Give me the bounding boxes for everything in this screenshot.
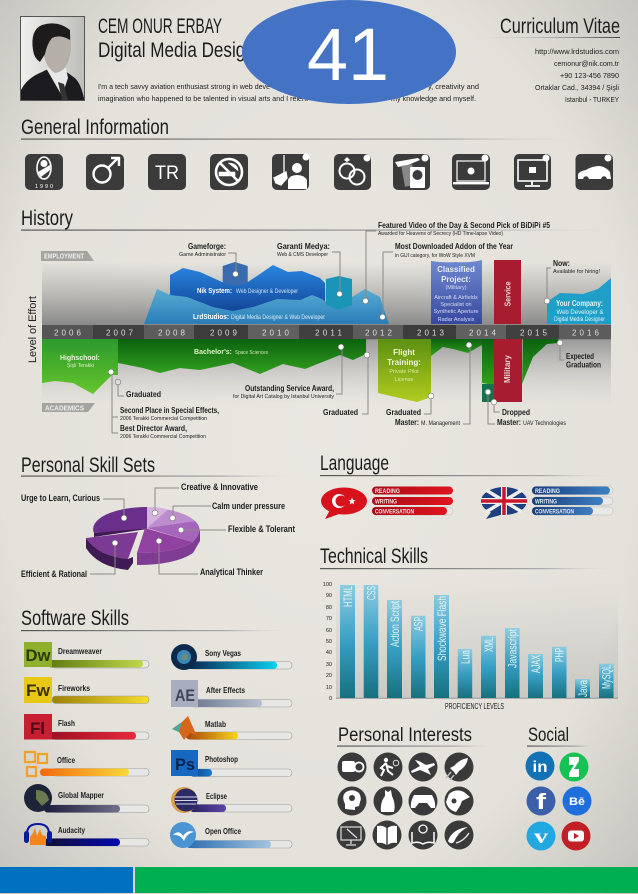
- leader lines and labels: employment: Garanti Medya:: [277, 241, 330, 251]
- area: bachelor's: Space Sciences: [235, 350, 268, 356]
- number badge: [242, 0, 456, 104]
- icon: photography: [338, 752, 366, 782]
- heading: Software Skills: Software Skills: [21, 607, 129, 630]
- leader lines and labels: employment: Game Administrator: [179, 252, 226, 258]
- area: Nik System employment: Web Designer & Developer: [236, 289, 298, 295]
- skill: Fireworks: [24, 677, 149, 704]
- area: expected graduation: [522, 339, 558, 384]
- icon: no smoking: [210, 154, 248, 190]
- chart: personal skills pie: Analytical Thinker: [200, 567, 263, 577]
- area: highschool: [42, 339, 118, 394]
- skill: Office: Office: [57, 755, 75, 765]
- area: bachelor's: Bachelor's:: [194, 347, 232, 356]
- leader lines and labels: academics: 2006 Terakki Commercial Competition: [120, 416, 207, 422]
- panel: language English: READING: [535, 489, 560, 495]
- skill: Photoshop: Ps: [175, 755, 195, 774]
- chart: technical skills bars: [323, 582, 618, 711]
- skill: Photoshop: Photoshop: [205, 754, 238, 764]
- skill: Audacity: [24, 824, 149, 846]
- header: intro text: y, creativity and: [428, 82, 479, 91]
- panel: language Turkish: [321, 486, 453, 519]
- skill: Global Mapper: Global Mapper: [58, 790, 105, 800]
- area: LrdStudios employment: LrdStudios:: [193, 312, 229, 321]
- area: classified project: Synthetic Aperture: [434, 309, 478, 315]
- chart: personal skills pie: Flexible & Tolerant: [228, 524, 295, 534]
- header: intro text: [98, 82, 479, 103]
- area: flight training: Flight: [393, 348, 415, 357]
- axis ticks: 90: [326, 593, 332, 599]
- chart: personal skills pie: Urge to Learn, Curious: [21, 493, 100, 503]
- panel: language English: WRITING: [535, 500, 557, 506]
- area: master management: [431, 339, 482, 356]
- area: your company: Digital Media Designer: [554, 317, 605, 323]
- panel: language English: [481, 486, 613, 519]
- timeline year band: 2009: [210, 328, 238, 338]
- skill: Dreamweaver: Dw: [26, 646, 51, 665]
- chart: personal skills pie: Calm under pressure: [212, 501, 285, 511]
- header: job title: Digital Media Designer: [98, 39, 270, 62]
- leader lines and labels: employment: Available for hiring!: [553, 269, 600, 275]
- timeline year band: 2016: [572, 328, 600, 338]
- leader lines and labels: academics: Best Director Award,: [120, 423, 187, 433]
- area: military: Military: [503, 354, 512, 383]
- chart: technical skills bars: ASP: [412, 617, 426, 631]
- timeline year band: 2014: [469, 328, 497, 338]
- area: your company: Your Company:: [556, 299, 603, 308]
- area: master UAV: [482, 339, 494, 402]
- area: your company: [547, 278, 611, 324]
- area: highschool: Şişli Terakki: [67, 363, 94, 369]
- icon: LinkedIn: in: [532, 759, 548, 776]
- area: your company: Web Developer &: [557, 310, 603, 316]
- leader lines and labels: academics: [108, 340, 601, 440]
- timeline year band: 2008: [158, 328, 186, 338]
- axis ticks: 70: [326, 616, 332, 622]
- icon: UK flag speech bubble: [481, 487, 527, 519]
- icon: open book: [372, 820, 402, 850]
- icon: car: [576, 154, 613, 190]
- axis ticks: 80: [326, 605, 332, 611]
- skill: Audacity: Audacity: [58, 825, 85, 835]
- icon: swirl logo: [444, 820, 474, 850]
- skill: Fireworks: Fw: [26, 681, 51, 700]
- chart: technical skills bars: HTML: [341, 586, 355, 607]
- axis label: level of effort: Level of Effort: [27, 296, 39, 363]
- icon: DeviantArt: [560, 752, 588, 782]
- heading: Personal Skill Sets: Personal Skill Sets: [21, 454, 155, 477]
- chart: personal skills pie: Efficient & Rational: [21, 569, 87, 579]
- heading: Technical Skills: Technical Skills: [320, 545, 428, 568]
- icon: baby born 1990: 1990: [35, 184, 53, 190]
- axis ticks: 50: [326, 639, 332, 645]
- skill: Matlab: [172, 716, 292, 740]
- chart: technical skills bars: Lua: [458, 650, 472, 664]
- panel: software skills left column: [24, 642, 149, 846]
- leader lines and labels: employment: in GUI category, for WoW Style XVM: [395, 253, 475, 259]
- leader lines and labels: employment: Web & CMS Developer: [277, 252, 328, 258]
- timeline year band: 2010: [262, 328, 290, 338]
- header: contact details: http://www.lrdstudios.com: [535, 47, 619, 56]
- icon: aviation: [408, 752, 438, 782]
- icon: TR nationality: TR: [155, 163, 179, 184]
- chart: technical skills bars: Action Script: [388, 601, 402, 647]
- area: bachelor's: [118, 339, 366, 374]
- leader lines and labels: academics: Graduation: [566, 360, 601, 370]
- label: employment: EMPLOYMENT: [44, 254, 85, 260]
- header: intro text: my knowledge and myself.: [391, 94, 476, 103]
- chart: technical skills bars: Java: [576, 680, 590, 697]
- chart: personal skills pie: Creative & Innovative: [181, 482, 258, 492]
- label: employment: [41, 251, 94, 261]
- icon: windows desktop: [514, 154, 551, 190]
- header: intro text: I'm a tech savvy aviation enthusiast strong in web deve: [98, 82, 270, 91]
- heading: Social: Social: [528, 725, 569, 746]
- area: flight training: Training:: [387, 358, 421, 367]
- chart: technical skills bars: PHP: [552, 648, 566, 662]
- leader lines and labels: academics: Dropped: [502, 407, 530, 417]
- icon: Behance: Bē: [569, 796, 585, 808]
- chart: technical skills bars: CSS: [364, 586, 378, 600]
- timeline year band: 2013: [417, 328, 445, 338]
- skill: Sony Vegas: Sony Vegas: [205, 648, 241, 658]
- panel: language Turkish: WRITING: [375, 500, 397, 506]
- leader lines and labels: academics: Second Place in Special Effects,: [120, 405, 219, 415]
- area: flight training: License: [395, 377, 413, 383]
- leader lines and labels: academics: Master:: [497, 417, 521, 427]
- timeline year band: 2012: [365, 328, 393, 338]
- area: classified project: Radar Analysis: [438, 317, 475, 323]
- header: contact details: [535, 47, 619, 104]
- skill: Dreamweaver: Dreamweaver: [58, 646, 103, 656]
- header: contact details: Ortaklar Cad., 34394 / Şişli: [535, 83, 619, 92]
- icon: computer graphics: [336, 820, 366, 850]
- leader lines and labels: employment: Awarded for Heavens of Secrecy (HD Time-lapse Video): [378, 231, 503, 237]
- icon: TR nationality: [148, 154, 186, 190]
- icon: YouTube: [562, 822, 590, 850]
- area: LrdStudios employment: [144, 289, 389, 324]
- heading: Personal Interests: Personal Interests: [338, 725, 472, 746]
- skill: Fireworks: Fireworks: [58, 683, 90, 693]
- skill: Photoshop: [171, 750, 292, 776]
- header: contact details: Istanbul - TURKEY: [565, 95, 619, 104]
- label: academics: [42, 403, 95, 412]
- header: intro text: imagination who happened to be talented in visual arts and I relent: [98, 94, 309, 103]
- area: highschool: Highschool:: [60, 353, 100, 362]
- leader lines and labels: employment: Most Downloaded Addon of the Year: [395, 241, 514, 251]
- skill: Flash: [24, 714, 149, 740]
- skill: Eclipse: [171, 787, 292, 813]
- footer bar: green: [135, 867, 638, 893]
- skill: Flash: Fl: [30, 719, 45, 738]
- leader lines and labels: academics: Outstanding Service Award,: [245, 383, 334, 393]
- skill: Flash: Flash: [58, 718, 75, 728]
- icon: wedding rings single: [334, 154, 371, 190]
- timeline year band: 2007: [106, 328, 134, 338]
- panel: software skills right column: [170, 644, 292, 848]
- leader lines and labels: employment: Gameforge:: [188, 241, 226, 251]
- timeline year band: 2011: [315, 328, 343, 338]
- footer bar: blue: [0, 867, 133, 893]
- icon: space art: [444, 786, 474, 816]
- area: classified project: (Military): [445, 285, 467, 291]
- timeline year band: [42, 325, 611, 339]
- axis ticks: 10: [326, 685, 332, 691]
- area: Nik System employment: Nik System:: [197, 286, 232, 295]
- leader lines and labels: academics: 2006 Terakki Commercial Competition: [120, 434, 206, 440]
- icon: baby born 1990: [25, 154, 63, 190]
- area: classified project: Project:: [441, 275, 471, 284]
- area: classified project: Specialist on: [440, 302, 472, 308]
- leader lines and labels: academics: for Digital Art Catalog by Istanbul University: [233, 394, 334, 400]
- chart: technical skills bars: MySQL: [600, 665, 614, 689]
- chart: personal skills pie: [21, 482, 295, 579]
- leader lines and labels: academics: UAV Technologies: [523, 421, 566, 427]
- header: portrait photo: [20, 16, 84, 100]
- area: classified project: [431, 260, 482, 324]
- area: flight training: [378, 339, 431, 402]
- area: classified project: Aircraft & Airfields: [434, 295, 478, 301]
- chart: technical skills bars: AJAX: [529, 655, 543, 673]
- leader lines and labels: academics: Graduated: [126, 389, 161, 399]
- icon: soldier military service: [272, 154, 310, 190]
- icon: psychology head: [338, 786, 366, 816]
- panel: social icons: [526, 752, 592, 850]
- area: flight training: Private Pilot: [389, 369, 419, 375]
- skill: Eclipse: Eclipse: [206, 791, 227, 801]
- heading: History: History: [21, 207, 73, 230]
- chart: technical skills bars: XML: [482, 637, 496, 652]
- chart: technical skills bars: PROFICIENCY LEVELS: [445, 702, 504, 711]
- label: academics: ACADEMICS: [45, 406, 84, 412]
- leader lines and labels: employment: Featured Video of the Day & Second Pick of BiDiPi #5: [378, 220, 550, 230]
- panel: general information icons: [25, 154, 613, 190]
- leader lines and labels: academics: Graduated: [323, 407, 358, 417]
- icon: Turkish flag speech bubble: [321, 488, 367, 519]
- axis ticks: 0: [329, 696, 332, 702]
- skill: Global Mapper: [24, 784, 149, 812]
- panel: language Turkish: CONVERSATION: [375, 510, 414, 516]
- icon: cat: [374, 786, 402, 816]
- area: Gameforge employment: [223, 262, 248, 286]
- area: classified project: Classified: [437, 265, 475, 274]
- chart: technical skills bars: Shockwave Flash: [435, 596, 449, 661]
- icon: Facebook: f: [536, 789, 547, 814]
- heading: General Information: General Information: [21, 116, 169, 139]
- leader lines and labels: employment: [179, 220, 600, 320]
- panel: personal interests icons: [336, 752, 474, 850]
- skill: Matlab: Matlab: [205, 719, 226, 729]
- area: service: [494, 260, 521, 324]
- icon: rocket: [444, 752, 474, 782]
- skill: After Effects: [171, 680, 292, 707]
- panel: language Turkish: READING: [375, 489, 400, 495]
- panel: language English: CONVERSATION: [535, 510, 574, 516]
- icon: male symbol: [86, 154, 124, 190]
- chart: history timeline: [27, 220, 611, 440]
- heading: Language: Language: [320, 452, 389, 475]
- leader lines and labels: academics: Master:: [395, 417, 419, 427]
- icon: tennis: [374, 752, 402, 782]
- skill: After Effects: After Effects: [206, 685, 245, 695]
- chart: technical skills bars: Javascript: [506, 629, 520, 668]
- axis ticks: 20: [326, 673, 332, 679]
- area: Garanti Medya employment: [326, 276, 352, 310]
- icon: plane and passport: [393, 154, 430, 190]
- icon: game controller: [408, 786, 438, 816]
- header: contact details: +90 123-456 7890: [560, 71, 619, 80]
- axis ticks: 100: [323, 582, 332, 588]
- icon: book with lightbulb: [408, 820, 438, 850]
- icon: apple laptop: [452, 154, 490, 190]
- skill: Dreamweaver: [24, 642, 149, 668]
- number badge: 41: [307, 13, 389, 96]
- area: military: [494, 339, 522, 402]
- leader lines and labels: academics: M. Management: [421, 421, 460, 427]
- timeline year band: 2006: [54, 328, 82, 338]
- icon: Vimeo: v: [534, 826, 548, 848]
- axis ticks: 30: [326, 662, 332, 668]
- axis ticks: [323, 582, 332, 702]
- skill: Open Office: [170, 822, 292, 848]
- skill: Open Office: Open Office: [205, 826, 241, 836]
- area: LrdStudios employment: Digital Media Designer & Web Developer: [231, 315, 325, 321]
- leader lines and labels: employment: Now:: [553, 258, 570, 268]
- header: contact details: cemonur@nik.com.tr: [554, 59, 619, 68]
- leader lines and labels: academics: Graduated: [386, 407, 421, 417]
- header: name: CEM ONUR ERBAY: [98, 15, 222, 38]
- axis ticks: 40: [326, 650, 332, 656]
- skill: Sony Vegas: [171, 644, 292, 670]
- axis ticks: 60: [326, 628, 332, 634]
- area: Nik System employment: [170, 265, 325, 320]
- leader lines and labels: academics: Expected: [566, 351, 594, 361]
- timeline year band: 2015: [520, 328, 548, 338]
- skill: Office: [25, 752, 149, 776]
- skill: After Effects: AE: [175, 686, 195, 705]
- area: service: Service: [504, 281, 512, 306]
